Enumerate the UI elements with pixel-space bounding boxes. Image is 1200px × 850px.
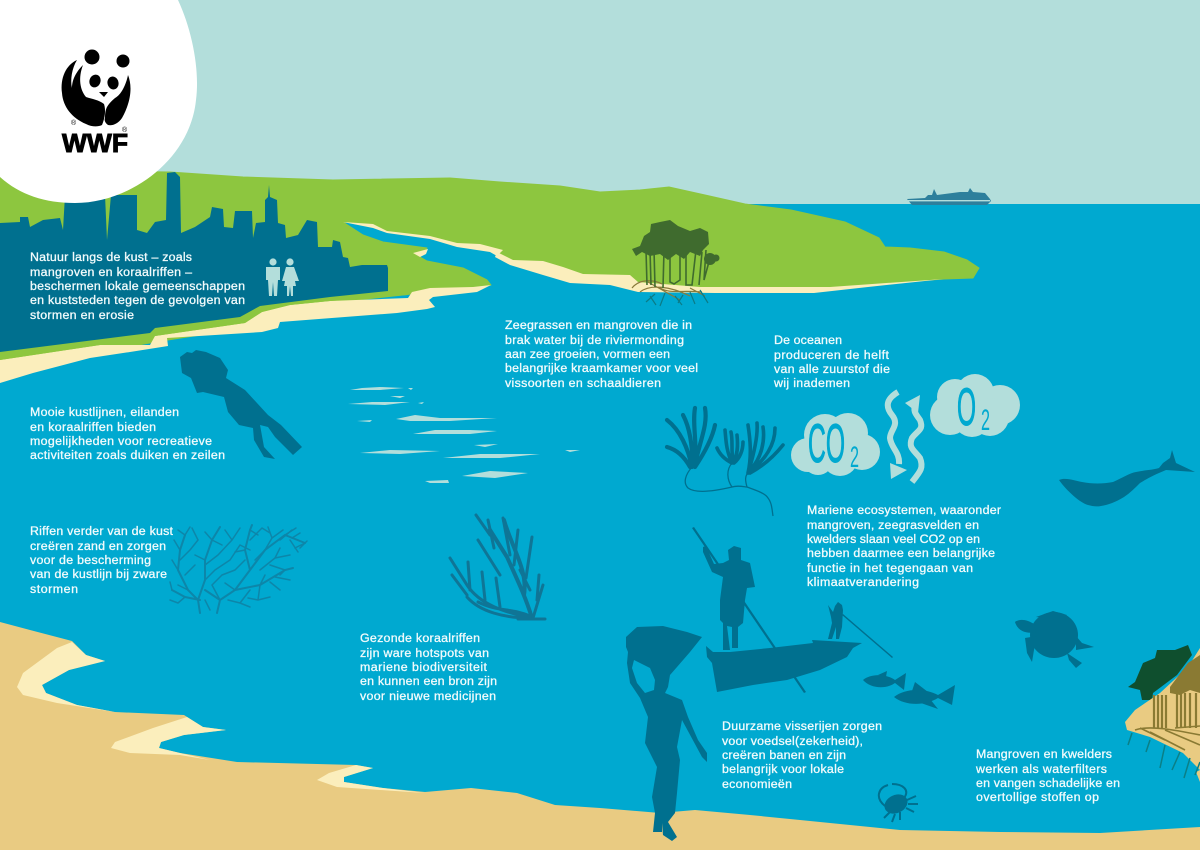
callout: water filters: overtollige stoffen op [976,790,1099,804]
city skyline [0,172,388,352]
logo: WWF panda [62,50,130,158]
water ripples [348,387,580,483]
island sand [1125,648,1200,782]
callout: biodiversity: mariene biodiversiteit [360,660,488,674]
callout: outer reefs: voor de bescherming [30,553,151,567]
callout: oxygen [773,333,890,390]
icon: branching coral [450,515,545,619]
icon: fan coral [170,525,307,613]
panel: right island with mangrove [1125,645,1200,782]
callout: nursery: belangrijke kraamkamer voor veel [505,361,698,375]
light sand 2 [111,717,226,760]
callout: coast protection: Natuur langs de kust – zoals [30,250,192,264]
callout: carbon storage [807,503,1001,589]
callout: water filters: Mangroven en kwelders [976,747,1112,761]
icon: fishing boat with fishermen [692,527,893,693]
callout: recreation: mogelijkheden voor recreatieve [30,434,212,448]
callout: outer reefs: van de kustlijn bij zware [30,567,167,581]
callout: recreation [30,405,225,462]
green band under the city [0,291,408,360]
panda right side [105,75,130,125]
mangrove canopy behind [1128,645,1192,700]
sky [0,0,1200,205]
callout: nursery: aan zee groeien, vormen een [505,347,670,361]
callout: recreation: Mooie kustlijnen, eilanden [30,405,179,419]
callout: outer reefs: creëren zand en zorgen [30,539,166,553]
callout: fisheries: voor voedsel(zekerheid), [722,734,863,748]
icon: man and woman [266,258,299,296]
callout: biodiversity [360,631,497,703]
icon: seaweed [667,408,783,516]
callout: outer reefs: Riffen verder van de kust [30,524,174,538]
callout: coast protection: en kuststeden tegen de gevolgen van [30,293,245,307]
callout: nursery [505,318,698,390]
callout: fisheries: creëren banen en zijn [722,748,846,762]
icon: O2 cloud: 2 [981,404,990,437]
registered marks [71,119,128,134]
arrow: O2 up [905,395,922,482]
callout: biodiversity: en kunnen een bron zijn [360,674,497,688]
callout: fisheries: economieën [722,777,792,791]
icon: woman with basket [626,626,707,841]
callout: coast protection [30,250,245,322]
icon: crab [879,784,918,822]
icon: CO2 cloud: CO [808,412,845,474]
callout: coast protection: mangroven en koraalriffen – [30,265,192,279]
icon: O2 cloud [930,374,1020,437]
small river beach [413,249,428,257]
callout: carbon storage: klimaatverandering [807,575,919,589]
registered marks: ® [122,126,128,134]
callout: oxygen: wij inademen [773,376,850,390]
callout: nursery: vissoorten en schaaldieren [505,376,661,390]
callout: carbon storage: kwelders slaan veel CO2 op en [807,532,980,546]
callout: carbon storage: functie in het tegengaan van [807,561,973,575]
icon: O2 cloud: O [957,378,976,437]
callout: nursery: brak water bij de riviermonding [505,333,684,347]
callout: water filters: en vangen schadelijke en [976,776,1120,790]
callout: biodiversity: zijn ware hotspots van [360,646,489,660]
callout: carbon storage: Mariene ecosystemen, waaronder [807,503,1001,517]
callout: coast protection: stormen en erosie [30,308,134,322]
island beach [495,252,944,293]
callout: fisheries: belangrijk voor lokale [722,762,844,776]
callout: water filters [975,747,1120,804]
callout: carbon storage: hebben daarmee een belangrijke [807,546,995,560]
icon: whale [1059,450,1195,506]
mainland beach [0,285,491,383]
callout: coast protection: beschermen lokale gemeenschappen [30,279,245,293]
arrow: CO2 down [888,392,907,479]
trunks and roots [1135,693,1200,750]
callout: oxygen: produceren de helft [774,348,890,362]
callout: oxygen: van alle zuurstof die [774,362,890,376]
WWF wordmark: WWF [62,128,128,158]
panel: northern coast with city [0,170,979,383]
callout: nursery: Zeegrassen en mangroven die in [505,318,692,332]
callout: oxygen: De oceanen [774,333,842,347]
panda ears [84,50,130,68]
sand [0,622,1200,850]
registered marks: ® [71,119,77,127]
callout: fisheries [722,719,882,791]
icon: cruise ship [907,188,991,205]
icon: tuna fish [863,671,955,709]
icon: CO2 cloud: 2 [850,441,859,474]
panda eyes and nose [88,73,120,97]
green land [0,170,979,372]
callout: recreation: activiteiten zoals duiken en zeilen [30,448,225,462]
panel: southern beach [0,622,1200,850]
callout: water filters: werken als waterfilters [975,762,1107,776]
callout: fisheries: Duurzame visserijen zorgen [722,719,882,733]
callout: biodiversity: Gezonde koraalriffen [360,631,480,645]
callout: recreation: en koraalriffen bieden [30,420,156,434]
icon: diver [180,350,302,459]
callout: biodiversity: voor nieuwe medicijnen [360,689,496,703]
panel: white logo blob [0,0,197,203]
callout: carbon storage: mangroven, zeegrasvelden en [807,518,979,532]
light sand 3 [317,765,425,793]
callout: outer reefs [30,524,174,596]
callout: outer reefs: stormen [30,582,78,596]
river beach [343,222,503,256]
sea [0,204,1200,850]
light sand 1 [17,642,115,712]
panda body [62,60,105,126]
icon: sea turtle [1015,611,1094,668]
icon: mangrove tree on island [632,220,720,306]
